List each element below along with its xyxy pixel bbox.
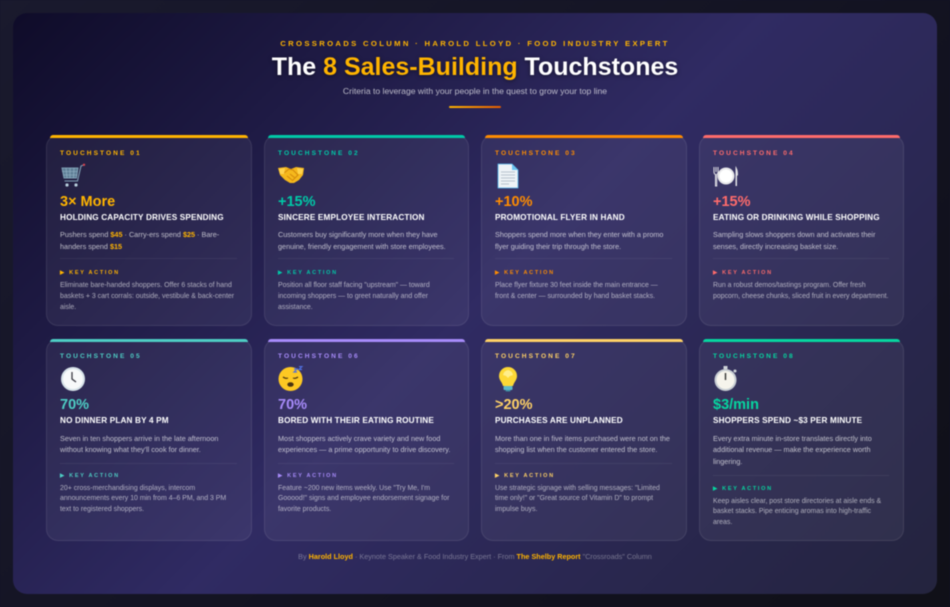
- heading 03: PROMOTIONAL FLYER IN HAND: [495, 212, 625, 222]
- action text 01: aisle.: [60, 304, 76, 311]
- description 04: senses, directly increasing basket size.: [713, 242, 838, 251]
- action text 04: popcorn, cheese chunks, sliced fruit in every department.: [713, 293, 888, 300]
- action text 06: Gooood!" signs and employee endorsement signage for: [278, 495, 449, 502]
- accent bar 01: [50, 135, 248, 138]
- action text 06: Feature ~200 new items weekly. Use "Try Me, I'm: [278, 484, 430, 492]
- heading 01: HOLDING CAPACITY DRIVES SPENDING: [60, 212, 224, 222]
- description 07: shopping list when the customer entered the store.: [495, 445, 657, 454]
- action text 04: [712, 281, 888, 300]
- action text 05: [60, 484, 226, 514]
- label 08: TOUCHSTONE 08: [713, 353, 795, 360]
- description 04: [712, 230, 876, 252]
- action text 02: assistance.: [278, 304, 313, 311]
- stat 03: +10%: [495, 194, 532, 210]
- header eyebrow: CROSSROADS COLUMN · HAROLD LLOYD · FOOD INDUSTRY EXPERT: [280, 39, 670, 48]
- action text 04: Run a robust demos/tastings program. Offer fresh: [713, 282, 866, 289]
- action text 07: [494, 484, 660, 513]
- description 07: More than one in five items purchased were not on the: [495, 434, 670, 442]
- action text 08: [712, 497, 882, 526]
- description 05: [60, 434, 219, 454]
- heading 07: PURCHASES ARE UNPLANNED: [495, 416, 623, 425]
- description 01: Pushers spend $45 · Carry-ers spend $25 · Bare-: [60, 230, 219, 239]
- heading 06: BORED WITH THEIR EATING ROUTINE: [278, 416, 434, 425]
- heading 05: NO DINNER PLAN BY 4 PM: [60, 416, 169, 425]
- action text 01: [60, 281, 234, 311]
- subtitle: Criteria to leverage with your people in the quest to grow your top line: [343, 86, 607, 96]
- key action label 07: ▶ KEY ACTION: [495, 473, 555, 479]
- description 01: handers spend $15: [60, 242, 122, 251]
- panel: touchstone 02: [264, 135, 469, 326]
- action text 03: front & center — surrounded by hand basket stacks.: [495, 293, 655, 300]
- description 06: [278, 434, 450, 454]
- action text 02: incoming shoppers — to greet naturally and offer: [278, 293, 428, 300]
- icon: plate and cutlery: [712, 166, 739, 188]
- title: The 8 Sales-Building Touchstones: [272, 53, 678, 81]
- action text 05: announcements every 10 min from 4–6 PM, and 3 PM: [60, 495, 226, 502]
- panel: touchstone 03: [481, 135, 687, 326]
- action text 03: [494, 281, 658, 300]
- description 06: experiences — a prime opportunity to drive discovery.: [278, 445, 450, 454]
- key action label 03: ▶ KEY ACTION: [495, 270, 555, 276]
- icon: document: [496, 162, 520, 190]
- description 04: Sampling slows shoppers down and activates their: [713, 230, 875, 239]
- icon: light bulb: [498, 366, 518, 392]
- accent bar 02: [268, 135, 465, 138]
- description 03: Shoppers spend more when they enter with a promo: [495, 230, 663, 239]
- key action label 01: ▶ KEY ACTION: [60, 270, 120, 276]
- stat 07: >20%: [495, 397, 532, 413]
- accent bar 05: [50, 339, 248, 342]
- action text 08: Keep aisles clear, post store directories at aisle ends &: [713, 498, 881, 504]
- heading 02: SINCERE EMPLOYEE INTERACTION: [278, 212, 425, 222]
- heading 08: SHOPPERS SPEND ~$3 PER MINUTE: [713, 416, 862, 425]
- description 02: Customers buy significantly more when they have: [278, 230, 438, 239]
- label 05: TOUCHSTONE 05: [60, 353, 142, 360]
- description 08: [712, 434, 872, 466]
- description 02: genuine, friendly engagement with store employees.: [278, 242, 446, 251]
- label 07: TOUCHSTONE 07: [495, 353, 577, 360]
- action text 06: favorite products.: [278, 506, 331, 513]
- key action label 08: ▶ KEY ACTION: [713, 486, 773, 492]
- panel: touchstone 07: [481, 339, 687, 541]
- action text 06: [278, 484, 450, 513]
- action text 07: time only!" or "Great source of Vitamin D" to prompt: [495, 495, 653, 502]
- accent bar 06: [268, 339, 465, 342]
- icon: handshake: [278, 166, 305, 184]
- description 03: flyer guiding their trip through the store.: [495, 242, 621, 251]
- accent bar 03: [485, 135, 683, 138]
- panel: touchstone 04: [699, 135, 904, 326]
- action text 07: Use strategic signage with selling messages: "Limited: [495, 484, 660, 492]
- icon: sleeping face: [278, 365, 304, 392]
- stat 06: 70%: [278, 397, 307, 413]
- stat 05: 70%: [60, 397, 89, 413]
- action text 03: Place flyer fixture 30 feet inside the main entrance —: [495, 282, 658, 289]
- key action label 02: ▶ KEY ACTION: [278, 270, 338, 276]
- accent bar 08: [703, 339, 900, 342]
- stat 02: +15%: [278, 194, 316, 210]
- description 05: without knowing what they'll cook for dinner.: [60, 445, 201, 454]
- action text 02: [278, 281, 430, 311]
- label 04: TOUCHSTONE 04: [713, 150, 795, 157]
- label 01: TOUCHSTONE 01: [60, 150, 142, 157]
- description 05: Seven in ten shoppers arrive in the late afternoon: [60, 434, 218, 442]
- panel: touchstone 06: [264, 339, 469, 541]
- action text 05: 20+ cross-merchandising displays, intercom: [60, 484, 195, 492]
- action text 01: Eliminate bare-handed shoppers. Offer 6 stacks of hand: [60, 282, 232, 289]
- action text 01: baskets + 3 cart corrals: outside, vestibule & back-center: [60, 293, 234, 300]
- label 02: TOUCHSTONE 02: [278, 150, 360, 157]
- description 06: Most shoppers actively crave variety and new food: [278, 434, 440, 442]
- panel: touchstone 08: [699, 339, 904, 541]
- panel: touchstone 01: [46, 135, 252, 326]
- description 02: [278, 230, 446, 252]
- label 06: TOUCHSTONE 06: [278, 353, 360, 360]
- label 03: TOUCHSTONE 03: [495, 150, 577, 157]
- stat 01: 3× More: [60, 194, 115, 210]
- description 08: Every extra minute in-store translates directly into: [713, 434, 872, 442]
- description 01: [60, 230, 220, 251]
- icon: shopping cart: [60, 163, 86, 188]
- footer credit: By Harold Lloyd · Keynote Speaker & Food Industry Expert · From The Shelby Report "Crossroads" Column: [298, 552, 652, 561]
- description 08: additional revenue — make the experience worth: [713, 445, 871, 454]
- action text 02: Position all floor staff facing "upstream" — toward: [278, 282, 430, 289]
- key action label 06: ▶ KEY ACTION: [278, 473, 338, 479]
- action text 08: basket stacks. Pipe enticing aromas into high-traffic: [713, 508, 871, 515]
- description 07: [494, 434, 670, 454]
- heading 04: EATING OR DRINKING WHILE SHOPPING: [713, 212, 880, 222]
- stat 04: +15%: [713, 194, 750, 210]
- stat 08: $3/min: [713, 397, 759, 413]
- action text 05: text to registered shoppers.: [60, 506, 144, 513]
- action text 07: impulse buys.: [495, 506, 537, 513]
- key action label 05: ▶ KEY ACTION: [60, 473, 120, 479]
- icon: clock: [60, 366, 86, 392]
- header accent divider: [449, 106, 501, 108]
- action text 08: areas.: [713, 519, 732, 526]
- accent bar 07: [485, 339, 683, 342]
- key action label 04: ▶ KEY ACTION: [713, 270, 773, 276]
- description 08: lingering.: [713, 456, 742, 466]
- icon: stopwatch: [714, 365, 738, 392]
- accent bar 04: [703, 135, 900, 138]
- panel: touchstone 05: [46, 339, 252, 541]
- description 03: [494, 230, 664, 252]
